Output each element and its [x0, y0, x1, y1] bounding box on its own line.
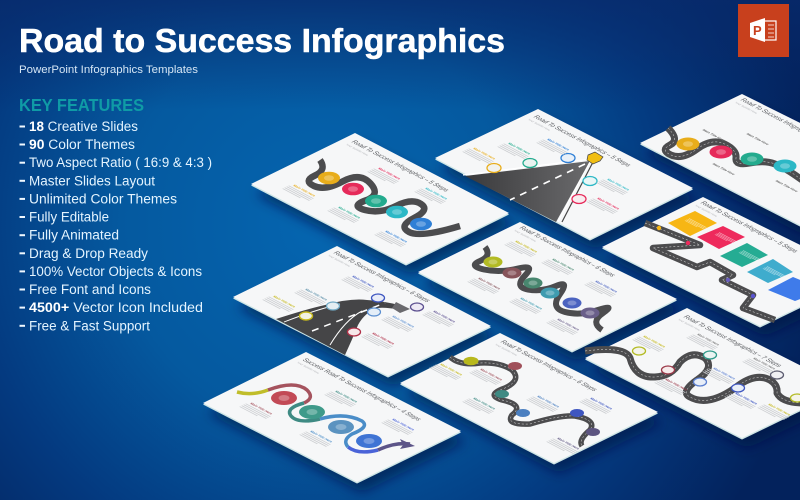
text blocks: Main Title Here — [334, 390, 359, 403]
text blocks: Main Title Here — [596, 197, 621, 210]
heading: key features: KEY FEATURES — [19, 95, 144, 115]
feature list: Two Aspect Ratio ( 16:9 & 4:3 ) — [29, 155, 212, 170]
step labels: Main Title Here — [701, 129, 726, 142]
colour boxes — [668, 211, 800, 301]
panel: slide zigzag road with colour boxes — [602, 197, 800, 328]
slide title: Your Subtitle Here — [296, 361, 321, 374]
step markers — [632, 347, 800, 402]
road markers — [657, 226, 755, 298]
text blocks — [468, 239, 620, 336]
text blocks: Main Title Here — [391, 418, 416, 431]
text blocks: Main Title Here — [642, 335, 667, 348]
panel: slide curved road 6 steps — [233, 246, 491, 378]
winding road — [665, 128, 800, 182]
text blocks: Main Title Here — [712, 367, 737, 380]
text blocks: Main Title Here — [696, 333, 721, 346]
step markers — [464, 357, 600, 436]
slide title: Road To Success Infographics – 6 Steps — [517, 226, 617, 278]
feature list: Unlimited Color Themes — [29, 191, 177, 206]
panel: slide mountain road 6 steps — [400, 333, 658, 464]
text blocks: Main Title Here — [424, 187, 449, 200]
zigzag road — [645, 223, 775, 320]
text blocks: Main Title Here — [337, 206, 362, 219]
text blocks: Main Title Here — [377, 167, 402, 180]
slide title: Road To Success Infographics – 6 Steps — [331, 251, 432, 303]
ribbon road — [237, 385, 410, 452]
text blocks: Main Title Here — [371, 332, 396, 345]
text blocks: Main Title Here — [546, 138, 571, 151]
subtitle: PowerPoint Infographics Templates — [19, 64, 199, 76]
text blocks: Main Title Here — [767, 403, 792, 416]
slide title: Your Subtitle Here — [494, 343, 519, 356]
text blocks — [430, 362, 615, 455]
feature list: Free Font and Icons — [29, 282, 151, 297]
feature list: Fully Animated — [29, 228, 119, 243]
step markers — [484, 256, 600, 318]
feature list: Fully Editable — [29, 210, 109, 224]
feature list — [20, 119, 212, 333]
text blocks: Main Title Here — [292, 184, 317, 197]
title: Road to Success Infographics — [19, 22, 505, 59]
text blocks: Main Title Here — [384, 230, 409, 243]
feature list: Free & Fast Support — [29, 318, 150, 333]
text blocks: Main Title Here — [507, 142, 532, 155]
panel: slide ribbon road 4 steps — [203, 352, 461, 484]
text blocks: Main Title Here — [514, 240, 539, 253]
panel: slide top right — [640, 94, 800, 226]
straight road — [463, 159, 593, 222]
text blocks: Main Title Here — [309, 430, 334, 443]
step labels: Main Title Here — [745, 133, 770, 146]
step markers — [271, 391, 382, 448]
feature list: 4500+ Vector Icon Included — [29, 300, 203, 315]
text blocks: Main Title Here — [351, 275, 376, 288]
feature list: 18 Creative Slides — [29, 119, 138, 134]
text blocks: Main Title Here — [472, 147, 497, 160]
text blocks: Main Title Here — [734, 392, 759, 405]
text blocks: Main Title Here — [472, 397, 497, 410]
slide title: Your Subtitle Here — [734, 101, 759, 114]
slide title: Your Subtitle Here — [327, 254, 352, 267]
winding road — [450, 357, 592, 446]
text blocks — [463, 137, 632, 215]
text blocks: Main Title Here — [439, 363, 464, 376]
slide title: Your Subtitle Here — [513, 229, 538, 242]
text blocks: Main Title Here — [664, 378, 689, 391]
feature list: Drag & Drop Ready — [29, 246, 148, 261]
text blocks: Main Title Here — [606, 178, 631, 191]
slide title: Your Subtitle Here — [677, 318, 702, 331]
step markers — [318, 172, 432, 230]
panel: slide straight road 5 steps — [435, 109, 693, 240]
slide title: Road To Success Infographics – 5 Steps — [531, 115, 633, 168]
text blocks: Main Title Here — [594, 280, 619, 293]
feature list: 90 Color Themes — [29, 137, 135, 152]
panel: slide winding road 6 steps — [418, 222, 677, 352]
text blocks: Main Title Here — [249, 402, 274, 415]
icon: PowerPoint logo — [738, 4, 789, 57]
winding road — [475, 247, 608, 330]
step labels: Main Title Here — [774, 180, 799, 193]
slide title: Road To Success Infographics – 6 Steps — [498, 340, 599, 392]
text blocks: Main Title Here — [519, 297, 544, 310]
slide title: Your Subtitle Here — [694, 204, 719, 217]
step labels: Main Title Here — [711, 163, 736, 176]
slide title: Road To Success Infographics – 5 Steps — [349, 140, 451, 193]
slide title: Your Subtitle Here — [527, 118, 552, 131]
curved road — [276, 300, 410, 355]
text blocks — [240, 389, 417, 448]
text blocks: Main Title Here — [589, 397, 614, 410]
feature list: Master Slides Layout — [29, 173, 155, 188]
step markers — [676, 138, 796, 172]
text blocks: Main Title Here — [556, 437, 581, 450]
step labels — [701, 129, 799, 193]
text blocks: Main Title Here — [556, 318, 581, 331]
step markers — [300, 294, 424, 336]
text blocks: Main Title Here — [477, 277, 502, 290]
text blocks — [283, 166, 450, 248]
text blocks: Main Title Here — [432, 310, 457, 323]
icon: PowerPoint logo: P — [753, 23, 762, 38]
text blocks — [633, 332, 793, 421]
slide title: Road To Success Infographics – 7 Steps — [681, 315, 783, 368]
icon: road sign — [587, 152, 603, 164]
slide title: Your Subtitle Here — [345, 143, 370, 156]
text blocks: Main Title Here — [304, 288, 329, 301]
panel: slide winding road 7 steps — [585, 308, 800, 440]
text blocks: Main Title Here — [479, 368, 504, 381]
step markers — [487, 154, 597, 204]
text blocks: Main Title Here — [391, 315, 416, 328]
text blocks — [263, 274, 458, 350]
feature list: 100% Vector Objects & Icons — [29, 264, 202, 279]
text blocks: Main Title Here — [272, 295, 297, 308]
winding road — [585, 350, 800, 403]
text blocks: Main Title Here — [536, 395, 561, 408]
arrowhead — [400, 439, 415, 449]
winding road — [309, 160, 460, 234]
slide title: Success Road To Success Infographics – 4 Steps — [300, 358, 423, 422]
text blocks: Main Title Here — [551, 258, 576, 271]
panel: slide winding road 5 steps — [251, 133, 509, 266]
text blocks: Main Title Here — [752, 357, 777, 370]
